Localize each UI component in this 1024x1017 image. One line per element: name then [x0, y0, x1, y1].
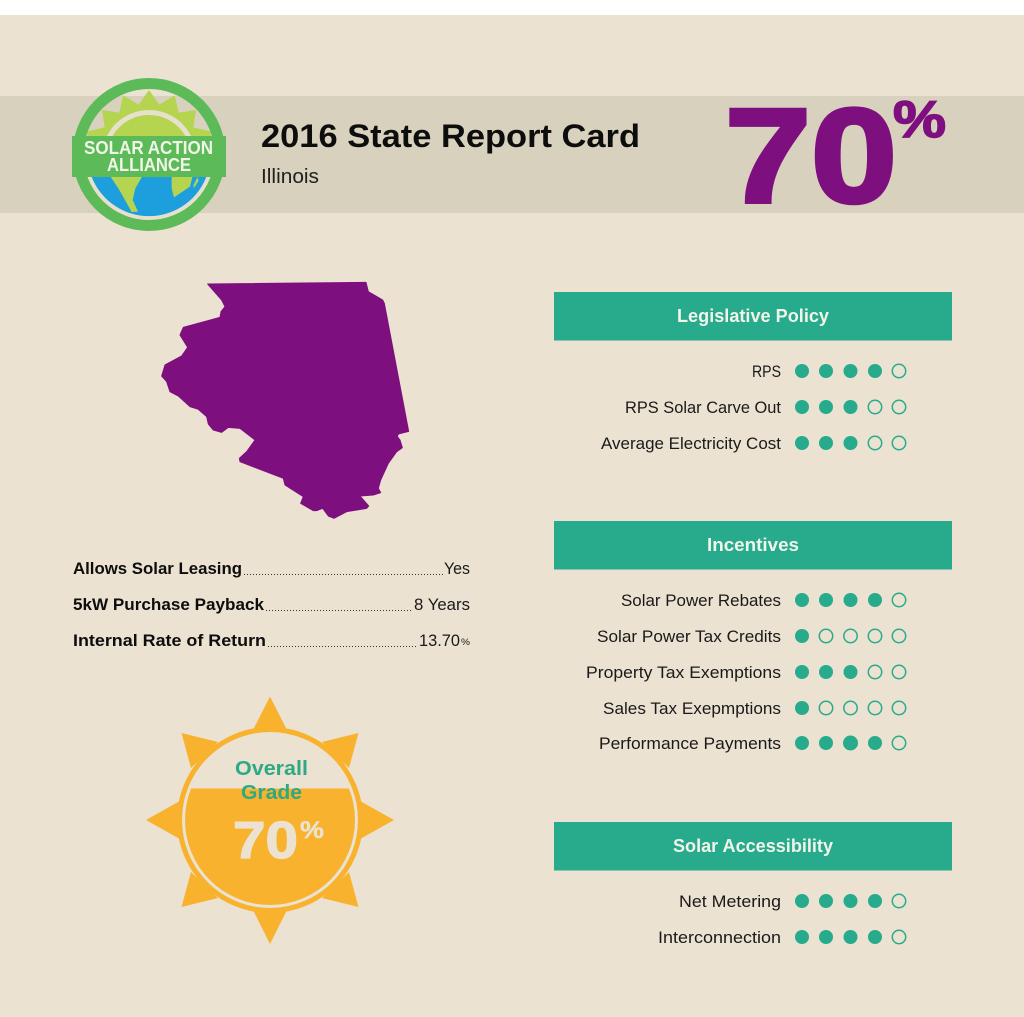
overall grade sun badge — [146, 696, 394, 944]
header band — [0, 96, 1024, 213]
icon: sun rays — [146, 696, 394, 944]
stat: internal rate of return: Internal Rate of Return — [73, 631, 266, 650]
big score 70% — [725, 82, 946, 231]
stat: purchase payback: 8 Years — [414, 595, 470, 614]
stat: solar leasing: Yes — [444, 559, 470, 578]
row: property tax exemptions, 3 of 5 — [586, 664, 906, 682]
row: performance payments, 4 of 5 — [599, 735, 906, 753]
heading: incentives: Incentives — [707, 535, 799, 555]
heading: solar accessibility: Solar Accessibility — [673, 836, 833, 856]
row: solar power rebates, 4 of 5: Solar Power Rebates — [621, 592, 781, 610]
grade value: 70 — [233, 812, 298, 870]
globe lower half — [85, 172, 213, 220]
row: RPS, 4 of 5: RPS — [752, 363, 781, 381]
icon: Solar Action Alliance logo: ALLIANCE — [107, 155, 191, 175]
row: net metering, 4 of 5 — [679, 893, 906, 911]
panel: legislative policy — [554, 292, 952, 453]
row: average electricity cost, 3 of 5: Average Electricity Cost — [601, 435, 781, 453]
subtitle: state name: Illinois — [261, 166, 319, 188]
stat: purchase payback: 5kW Purchase Payback — [73, 595, 265, 614]
row: average electricity cost, 3 of 5 — [601, 435, 906, 453]
big score 70%: % — [893, 91, 946, 149]
row: solar power rebates, 4 of 5 — [621, 592, 906, 610]
heading: incentives — [554, 521, 952, 570]
row: sales tax exepmptions, 1 of 5: Sales Tax Exepmptions — [603, 700, 781, 718]
panel: solar accessibility — [554, 822, 952, 947]
heading: legislative policy — [554, 292, 952, 340]
row: sales tax exepmptions, 1 of 5 — [603, 700, 906, 718]
row: RPS, 4 of 5 — [752, 363, 906, 381]
row: solar power tax credits, 1 of 5: Solar Power Tax Credits — [597, 628, 781, 646]
row: net metering, 4 of 5: Net Metering — [679, 893, 781, 911]
grade value — [233, 812, 324, 870]
big score 70%: 70 — [725, 82, 897, 231]
stat: solar leasing: Allows Solar Leasing — [73, 559, 242, 578]
stat: internal rate of return: % — [461, 637, 470, 647]
map: Illinois state shape — [162, 282, 409, 518]
row: property tax exemptions, 3 of 5: Property Tax Exemptions — [586, 664, 781, 682]
heading: legislative policy: Legislative Policy — [677, 306, 829, 326]
label: overall grade: Grade — [241, 782, 302, 804]
icon: Solar Action Alliance logo — [72, 84, 226, 226]
icon: Solar Action Alliance logo: SOLAR ACTION — [84, 138, 213, 158]
heading: solar accessibility — [554, 822, 952, 870]
row: solar power tax credits, 1 of 5 — [597, 628, 906, 646]
label: overall grade: Overall — [235, 758, 308, 780]
row: RPS solar carve out, 3 of 5 — [625, 399, 906, 417]
row: interconnection, 4 of 5: Interconnection — [658, 929, 781, 947]
stat: purchase payback — [73, 595, 470, 614]
title: 2016 State Report Card — [261, 118, 640, 154]
stat: internal rate of return: 13.70 — [419, 631, 460, 650]
label: overall grade — [235, 758, 308, 804]
panel: incentives — [554, 521, 952, 753]
grade value: % — [300, 817, 324, 844]
row: performance payments, 4 of 5: Performance Payments — [599, 735, 781, 753]
stat: internal rate of return — [73, 631, 470, 650]
row: interconnection, 4 of 5 — [658, 929, 906, 947]
row: RPS solar carve out, 3 of 5: RPS Solar Carve Out — [625, 399, 781, 417]
stats list — [73, 559, 470, 650]
stat: solar leasing — [73, 559, 470, 578]
